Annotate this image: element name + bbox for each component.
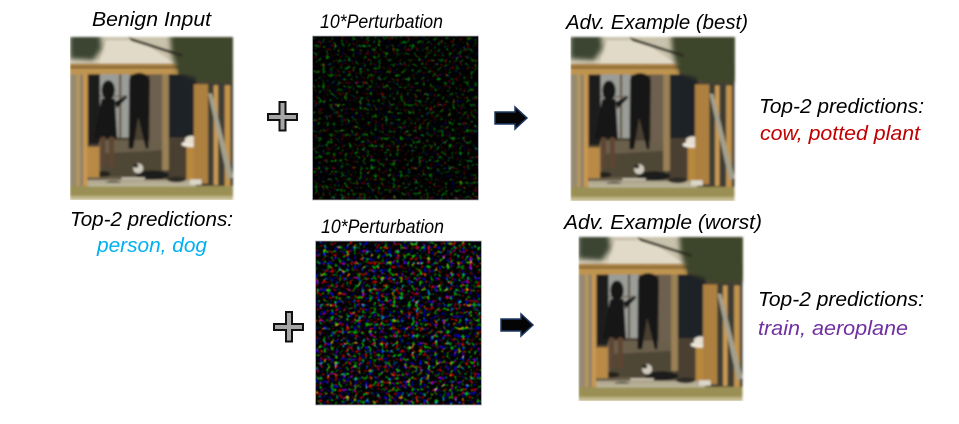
heading: perturbation top: 10*Perturbation (320, 12, 443, 33)
heading: benign input: Benign Input (92, 9, 213, 31)
label: benign top-2 predictions: Top-2 predictions: (70, 209, 233, 231)
label: best top-2 predictions: Top-2 predictions: (759, 96, 924, 118)
arrow bottom (501, 314, 533, 336)
image: strong perturbation noise (316, 241, 482, 405)
label: best top-2 predictions (759, 96, 924, 145)
image: benign input photo (70, 34, 236, 200)
label: worst top-2 predictions (758, 289, 924, 340)
arrow top (495, 107, 527, 129)
icon: plus top (268, 102, 297, 130)
image: adversarial example best (570, 34, 738, 201)
image: adversarial example worst (578, 234, 746, 401)
label: benign top-2 predictions (70, 209, 233, 257)
heading: perturbation bottom: 10*Perturbation (321, 217, 444, 238)
heading: adversarial example best: Adv. Example (best) (565, 12, 748, 34)
image: weak perturbation noise (312, 36, 478, 200)
label: worst top-2 predictions: Top-2 predictions: (758, 289, 924, 311)
label: worst top-2 predictions: train, aeroplane (758, 318, 908, 340)
icon: plus bottom (274, 312, 303, 342)
heading: adversarial example worst: Adv. Example (worst) (563, 212, 762, 234)
label: best top-2 predictions: cow, potted plant (760, 123, 922, 145)
label: benign top-2 predictions: person, dog (96, 235, 207, 257)
